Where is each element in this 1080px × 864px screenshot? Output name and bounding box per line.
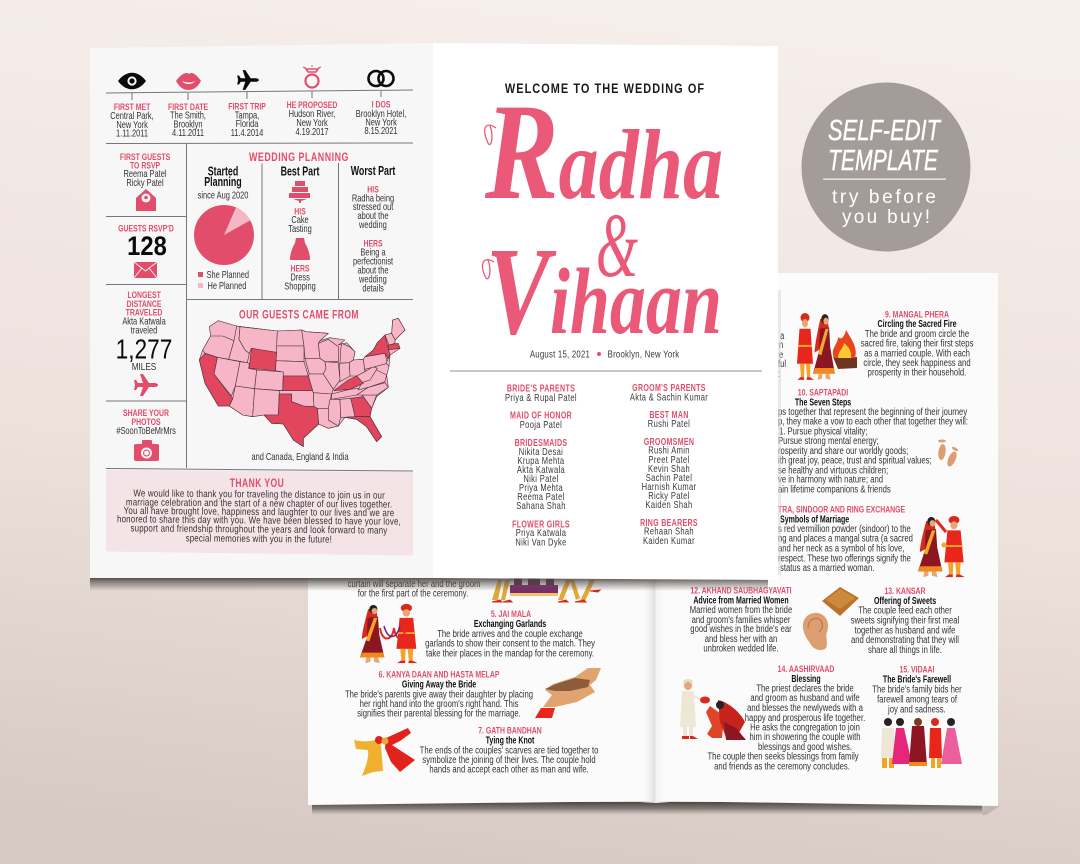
wedding party: bride's side: Akta Katwala <box>517 464 565 475</box>
step 11: sutra, sindoor and ring exchange: status as a married woman. <box>780 562 874 573</box>
step 5: jai mala: garlands to show their consent to the match. They <box>425 638 595 649</box>
text fragments clipped by cover: ful <box>778 358 786 369</box>
panel: thank you: THANK YOU <box>230 478 284 490</box>
text: thank you message: honored to share this day with you. We have been blessed to have your love, <box>117 513 401 527</box>
wedding party: groom's side: Rehaan Shah <box>644 526 694 537</box>
timeline: he proposed <box>287 99 337 137</box>
step 14: aashirvaad: and groom as husband and wife <box>750 692 860 703</box>
title: radha: Radha <box>484 75 723 228</box>
timeline: he proposed: Hudson River, <box>289 108 335 119</box>
timeline: first met: 1.11.2011 <box>116 127 148 139</box>
column: best part: Tasting <box>288 223 312 234</box>
column: worst part: HERS <box>363 237 383 249</box>
text: other countries: and Canada, England & India <box>251 451 349 462</box>
step 12: akhand saubhagyavati: Married women from the bride <box>690 604 792 615</box>
step 10: saptapadi: ain lifetime companions & friends <box>778 484 891 495</box>
timeline: i dos: I DOS <box>372 98 391 110</box>
step 14: aashirvaad: and blesses the newlyweds with a <box>747 702 863 713</box>
stat: first guests to rsvp: FIRST GUESTS <box>120 151 171 162</box>
text: ceremony intro fragment: for the first part of the ceremony. <box>358 588 468 599</box>
heading: our guests came from: OUR GUESTS CAME FROM <box>239 309 359 322</box>
step 15: vidaai <box>872 663 962 715</box>
timeline: first date: 4.11.2011 <box>172 127 204 138</box>
stat: guests rsvp'd <box>118 222 174 278</box>
wedding party: groom's side: Kevin Shah <box>648 463 690 474</box>
step 15: vidaai: joy and sadness. <box>887 704 946 715</box>
step 6: kanya daan and hasta melap: 6. KANYA DAAN AND HASTA MELAP <box>379 668 500 680</box>
icon: envelope <box>134 262 157 278</box>
timeline: first date: Brooklyn <box>174 118 203 130</box>
icon: wedding rings <box>368 71 394 86</box>
column: worst part: about the <box>358 264 389 276</box>
wedding party: groom's side: BEST MAN <box>649 409 689 420</box>
column: started planning: Started <box>208 165 238 179</box>
step 14: aashirvaad: him in showering the couple with <box>749 731 861 742</box>
wedding party: groom's side: GROOM'S PARENTS <box>632 382 706 393</box>
step 11: sutra, sindoor and ring exchange: ng and places a mangal sutra (a sacred <box>778 533 913 544</box>
step 15: vidaai: 15. VIDAAI <box>900 663 934 675</box>
column: worst part: Worst Part <box>351 165 396 178</box>
step 11: sutra, sindoor and ring exchange: Symbols of Marriage <box>780 513 849 525</box>
stat: first guests to rsvp <box>120 151 171 211</box>
step 7: gath bandhan: 7. GATH BANDHAN <box>478 724 542 736</box>
text fragments clipped by cover: e <box>779 349 783 360</box>
column: worst part: details <box>362 282 384 294</box>
step 9: mangal phera <box>861 308 974 378</box>
step 14: aashirvaad <box>707 663 865 772</box>
timeline: first date: The Smith, <box>170 109 206 121</box>
column: worst part <box>351 165 396 294</box>
step 15: vidaai: farewell among tears of <box>877 694 957 705</box>
step 6: kanya daan and hasta melap <box>345 668 533 719</box>
badge: self-edit template: you buy! <box>842 207 930 228</box>
stat: longest distance traveled: LONGEST <box>127 289 162 300</box>
wedding party: bride's side: Priya Mehta <box>519 482 563 493</box>
step 11: sutra, sindoor and ring exchange: and her neck as a symbol of his love, <box>778 543 904 554</box>
wedding party: bride's side: Priya Katwala <box>516 527 566 538</box>
badge: self-edit template <box>802 82 970 252</box>
timeline: first trip <box>228 100 266 138</box>
illustration: couple at sacred fire <box>797 313 857 380</box>
wedding party: groom's side: Sachin Patel <box>646 472 692 483</box>
column: best part <box>281 165 320 292</box>
wedding party: bride's side: Krupa Mehta <box>518 455 564 466</box>
step 6: kanya daan and hasta melap: The bride's parents give away their daughter by placing <box>345 689 533 700</box>
illustration: ear <box>803 613 828 650</box>
icon: diamond ring <box>303 65 321 88</box>
timeline: i dos: 8.15.2021 <box>364 125 398 136</box>
text fragments clipped by cover: n <box>779 339 783 350</box>
wedding party: bride's side: MAID OF HONOR <box>510 410 572 421</box>
column: worst part: Radha being <box>352 192 394 204</box>
wedding party: groom's side: Preet Patel <box>648 454 690 465</box>
panel: thank you <box>106 470 413 556</box>
column: best part: Cake <box>291 214 309 225</box>
step 9: mangal phera: prosperity in their household. <box>868 367 966 378</box>
stat: share your photos <box>116 407 176 461</box>
column: started planning <box>194 165 254 291</box>
step 5: jai mala: Exchanging Garlands <box>474 618 546 629</box>
illustration: hand with henna <box>535 668 601 718</box>
timeline: first met: Central Park, <box>110 110 154 121</box>
wedding party: groom's side: Harnish Kumar <box>642 481 696 492</box>
step 12: akhand saubhagyavati: 12. AKHAND SAUBHAGYAVATI <box>690 584 792 596</box>
legend: he planned: He Planned <box>208 280 246 291</box>
chart: planning pie <box>194 205 254 265</box>
step 10: saptapadi: Pursue strong mental energy; <box>778 435 879 446</box>
column: best part: HERS <box>290 262 310 274</box>
step 14: aashirvaad: The priest declares the bride <box>756 683 854 694</box>
step 6: kanya daan and hasta melap: Giving Away the Bride <box>402 678 476 690</box>
icon: camera <box>134 440 159 461</box>
step 13: kansar: and demonstrating that they will <box>851 634 959 645</box>
timeline: first trip: 11.4.2014 <box>231 127 263 138</box>
timeline: first met: FIRST MET <box>114 101 151 112</box>
wedding party: groom's side: Kaiden Shah <box>646 499 692 510</box>
timeline: first date: FIRST DATE <box>168 101 208 112</box>
stat: longest distance traveled: 1,277 <box>116 334 172 365</box>
wedding party: bride's side: BRIDESMAIDS <box>515 437 567 448</box>
column: best part: Shopping <box>284 280 316 292</box>
stat: longest distance traveled: MILES <box>132 361 156 372</box>
illustration: couple sindoor ceremony <box>918 516 965 577</box>
step 7: gath bandhan: The ends of the couples' scarves are tied together to <box>420 745 598 756</box>
icon: plane <box>134 374 158 396</box>
timeline: first met: New York <box>116 119 148 130</box>
timeline: i dos: Brooklyn Hotel, <box>356 108 406 119</box>
step 13: kansar <box>851 585 959 655</box>
step 12: akhand saubhagyavati: good wishes in the bride's ear <box>690 623 792 634</box>
step 10: saptapadi: ve in harmony with nature; and <box>778 474 883 485</box>
step 10: saptapadi: ps together that represent the beginning of their journey <box>778 406 968 417</box>
column: worst part: perfectionist <box>353 255 394 267</box>
text: thank you message: We would like to thank you for traveling the distance to join us in our <box>133 488 385 501</box>
panel: left page, timeline and stats <box>90 43 434 578</box>
step 11: sutra, sindoor and ring exchange: respect. These two offerings signify the <box>778 553 911 564</box>
stat: longest distance traveled <box>116 289 172 396</box>
panel: right page, cover <box>433 43 778 580</box>
illustration: couple exchanging garlands <box>360 604 418 663</box>
text: thank you message <box>117 487 401 545</box>
timeline: he proposed: HE PROPOSED <box>287 99 337 110</box>
step 14: aashirvaad: Blessing <box>791 673 821 684</box>
stat: guests rsvp'd: 128 <box>127 232 167 261</box>
back booklet shadow <box>312 802 1000 815</box>
timeline: he proposed: New York <box>296 117 328 128</box>
step 5: jai mala: take their places in the mandap for the ceremony. <box>426 648 594 659</box>
column: worst part: Being a <box>360 246 386 258</box>
step 7: gath bandhan <box>420 724 598 775</box>
column: started planning: since Aug 2020 <box>198 189 249 201</box>
step 14: aashirvaad: 14. AASHIRVAAD <box>778 663 834 674</box>
wedding party: groom's side: GROOMSMEN <box>644 436 694 447</box>
map: united states guest origins <box>199 318 405 447</box>
wedding party: bride's side <box>505 382 577 548</box>
step 5: jai mala: The bride arrives and the couple exchange <box>437 628 583 639</box>
step 10: saptapadi: rosperity and share our worldly goods; <box>778 445 908 456</box>
step 10: saptapadi: 10. SAPTAPADI <box>798 386 848 398</box>
wedding party: bride's side: Priya & Rupal Patel <box>505 392 577 403</box>
ceremony illustration: seated mandap fragment <box>492 578 600 602</box>
text: date and place <box>530 349 680 360</box>
column: worst part: wedding <box>358 273 387 285</box>
stat: guests rsvp'd: GUESTS RSVP'D <box>118 222 174 234</box>
text fragments clipped by cover: : <box>778 368 780 379</box>
wedding party: bride's side: Reema Patel <box>517 491 565 502</box>
step 9: mangal phera: sacred fire, taking their first steps <box>861 338 974 349</box>
wedding party: bride's side: Pooja Patel <box>520 419 562 430</box>
step 9: mangal phera: circle, they seek happiness and <box>863 357 971 368</box>
wedding party: groom's side: Akta & Sachin Kumar <box>630 392 708 403</box>
map base silhouette <box>199 318 405 447</box>
step 14: aashirvaad: blessings and good wishes. <box>758 741 852 752</box>
column: worst part: about the <box>358 210 389 221</box>
step 13: kansar: The couple feed each other <box>858 605 952 616</box>
text: thank you message: support and friendship throughout the years and look forward to many <box>130 523 388 536</box>
icon: open envelope with heart <box>136 189 156 211</box>
step 14: aashirvaad: happy and prosperous life together. <box>745 712 865 723</box>
step 11: sutra, sindoor and ring exchange <box>778 503 913 573</box>
wedding party: groom's side: RING BEARERS <box>640 517 698 528</box>
shadow: front booklet <box>90 290 781 591</box>
illustration: tied scarves <box>354 728 415 776</box>
wedding party: bride's side: Niki Patel <box>523 473 559 484</box>
step 13: kansar: together as husband and wife <box>855 625 956 636</box>
timeline: first met <box>110 101 154 139</box>
step 9: mangal phera: The bride and groom circle the <box>865 328 969 339</box>
step 14: aashirvaad: The couple then seeks blessings from family <box>707 751 859 762</box>
step 12: akhand saubhagyavati: Advice from Married Women <box>693 594 789 606</box>
stat: longest distance traveled: TRAVELED <box>126 306 162 318</box>
illustration: family farewell <box>881 718 962 768</box>
wedding party: groom's side <box>630 382 708 546</box>
text fragments clipped by cover <box>778 330 786 379</box>
step 10: saptapadi: p, they make a vow to each other that together they will: <box>778 416 968 427</box>
heading: welcome: WELCOME TO THE WEDDING OF <box>505 81 705 96</box>
wedding party: groom's side: Rushi Patel <box>648 418 690 429</box>
step 7: gath bandhan: Tying the Knot <box>486 734 535 746</box>
step 13: kansar: 13. KANSAR <box>884 585 926 596</box>
stat: share your photos: #SoonToBeMrMrs <box>116 425 176 436</box>
wedding party: bride's side: Nikita Desai <box>519 446 563 457</box>
timeline: he proposed: 4.19.2017 <box>295 126 329 137</box>
timeline: first trip: Florida <box>236 118 259 129</box>
step 10: saptapadi <box>778 386 968 495</box>
timeline rule lines <box>106 90 413 471</box>
stat: first guests to rsvp: Reema Patel <box>124 168 167 179</box>
illustration: priest blessing couple <box>680 679 746 740</box>
badge: self-edit template: TEMPLATE <box>828 145 938 177</box>
stat: longest distance traveled: Akta Katwala <box>122 315 166 327</box>
text: date and place: August 15, 2021 <box>530 349 590 360</box>
column: best part: Dress <box>290 271 310 283</box>
step 11: sutra, sindoor and ring exchange: TRA, SINDOOR AND RING EXCHANGE <box>778 503 906 515</box>
text: date and place: Brooklyn, New York <box>608 349 680 360</box>
step 13: kansar: sweets signifying their first meal <box>851 615 959 626</box>
step 5: jai mala: 5. JAI MALA <box>491 608 531 619</box>
text: ceremony intro fragment: curtain will separate her and the groom <box>348 578 480 589</box>
step 10: saptapadi: The Seven Steps <box>795 396 851 408</box>
panel: ceremony booklet spread <box>308 273 998 806</box>
icon: plane <box>237 70 259 90</box>
title: vihaan: Vihaan <box>486 223 722 361</box>
badge: self-edit template: SELF-EDIT <box>828 115 942 147</box>
step 10: saptapadi: se healthy and virtuous children; <box>778 465 888 476</box>
text: thank you message: You all have brought love, happiness and laughter to our lives and we are <box>124 505 394 518</box>
column: best part: Best Part <box>281 165 320 179</box>
step 9: mangal phera: 9. MANGAL PHERA <box>885 308 949 320</box>
stat: first guests to rsvp: Ricky Patel <box>126 177 164 188</box>
step 5: jai mala <box>425 608 595 659</box>
column: worst part: stressed out <box>353 201 394 212</box>
text: ceremony intro fragment <box>348 578 480 599</box>
step 6: kanya daan and hasta melap: signifies their parental blessing for the marriage. <box>357 708 521 719</box>
timeline: i dos <box>356 98 406 136</box>
step 13: kansar: share all things in life. <box>868 644 942 655</box>
icon: lips <box>176 73 201 90</box>
wedding party: bride's side: FLOWER GIRLS <box>512 518 570 530</box>
step 13: kansar: Offering of Sweets <box>874 595 936 606</box>
icon: dress <box>290 238 310 260</box>
step 10: saptapadi: ith great joy, peace, trust and spiritual values; <box>778 455 932 466</box>
column: best part: HIS <box>294 205 306 217</box>
text fragments clipped by cover: a <box>780 330 784 341</box>
step 14: aashirvaad: He asks the congregation to join <box>750 722 860 733</box>
step 15: vidaai: The bride's family bids her <box>872 684 962 695</box>
step 7: gath bandhan: symbolize the joining of their lives. The couple hold <box>422 754 596 765</box>
illustration: sweet <box>822 587 859 616</box>
title: ampersand: & <box>596 194 638 296</box>
icon: footprints <box>937 440 959 468</box>
step 12: akhand saubhagyavati <box>690 584 792 654</box>
step 12: akhand saubhagyavati: and bless her with an <box>705 633 777 644</box>
icon: eye <box>118 73 146 89</box>
badge: self-edit template: try before <box>832 187 936 208</box>
heading: wedding planning: WEDDING PLANNING <box>249 151 349 164</box>
step 11: sutra, sindoor and ring exchange: s red vermillion powder (sindoor) to the <box>778 523 911 534</box>
column: worst part: HIS <box>367 183 379 195</box>
step 6: kanya daan and hasta melap: her right hand into the groom's right hand. This <box>360 698 519 709</box>
timeline: first trip: FIRST TRIP <box>228 100 266 112</box>
stat: longest distance traveled: DISTANCE <box>127 298 162 309</box>
wedding party: groom's side: Kaiden Kumar <box>643 535 695 546</box>
step 12: akhand saubhagyavati: unbroken wedded life. <box>703 643 779 654</box>
wedding party: groom's side: Rushi Amin <box>648 445 690 456</box>
timeline: i dos: New York <box>365 116 397 128</box>
wedding party: bride's side: Niki Van Dyke <box>515 537 567 548</box>
step 10: saptapadi: 1. Pursue physical vitality; <box>779 426 867 437</box>
stat: share your photos: SHARE YOUR <box>123 407 169 418</box>
legend: she planned: She Planned <box>207 269 249 280</box>
step 9: mangal phera: as a married couple. With each <box>864 348 970 359</box>
column: worst part: wedding <box>358 219 387 230</box>
icon: cake <box>289 181 310 203</box>
step 12: akhand saubhagyavati: and groom's families whisper <box>692 614 790 625</box>
timeline: first trip: Tampa, <box>235 109 259 121</box>
stat: longest distance traveled: traveled <box>131 324 157 336</box>
timeline: first date <box>168 101 208 138</box>
wedding party: groom's side: Ricky Patel <box>648 490 690 501</box>
step 14: aashirvaad: and friends as the ceremony concludes. <box>714 761 850 772</box>
wedding party: bride's side: Sahana Shah <box>516 500 566 511</box>
step 15: vidaai: The Bride's Farewell <box>883 673 951 685</box>
stat: share your photos: PHOTOS <box>132 416 161 427</box>
step 7: gath bandhan: hands and accept each other as man and wife. <box>429 764 589 775</box>
column: started planning: Planning <box>204 176 242 189</box>
stat: first guests to rsvp: TO RSVP <box>130 159 161 171</box>
text: thank you message: special memories with you in the future! <box>186 532 332 545</box>
text: thank you message: marriage celebration and the start of a new chapter of our lives together. <box>126 496 392 510</box>
step 9: mangal phera: Circling the Sacred Fire <box>878 318 957 329</box>
wedding party: bride's side: BRIDE'S PARENTS <box>507 382 575 394</box>
